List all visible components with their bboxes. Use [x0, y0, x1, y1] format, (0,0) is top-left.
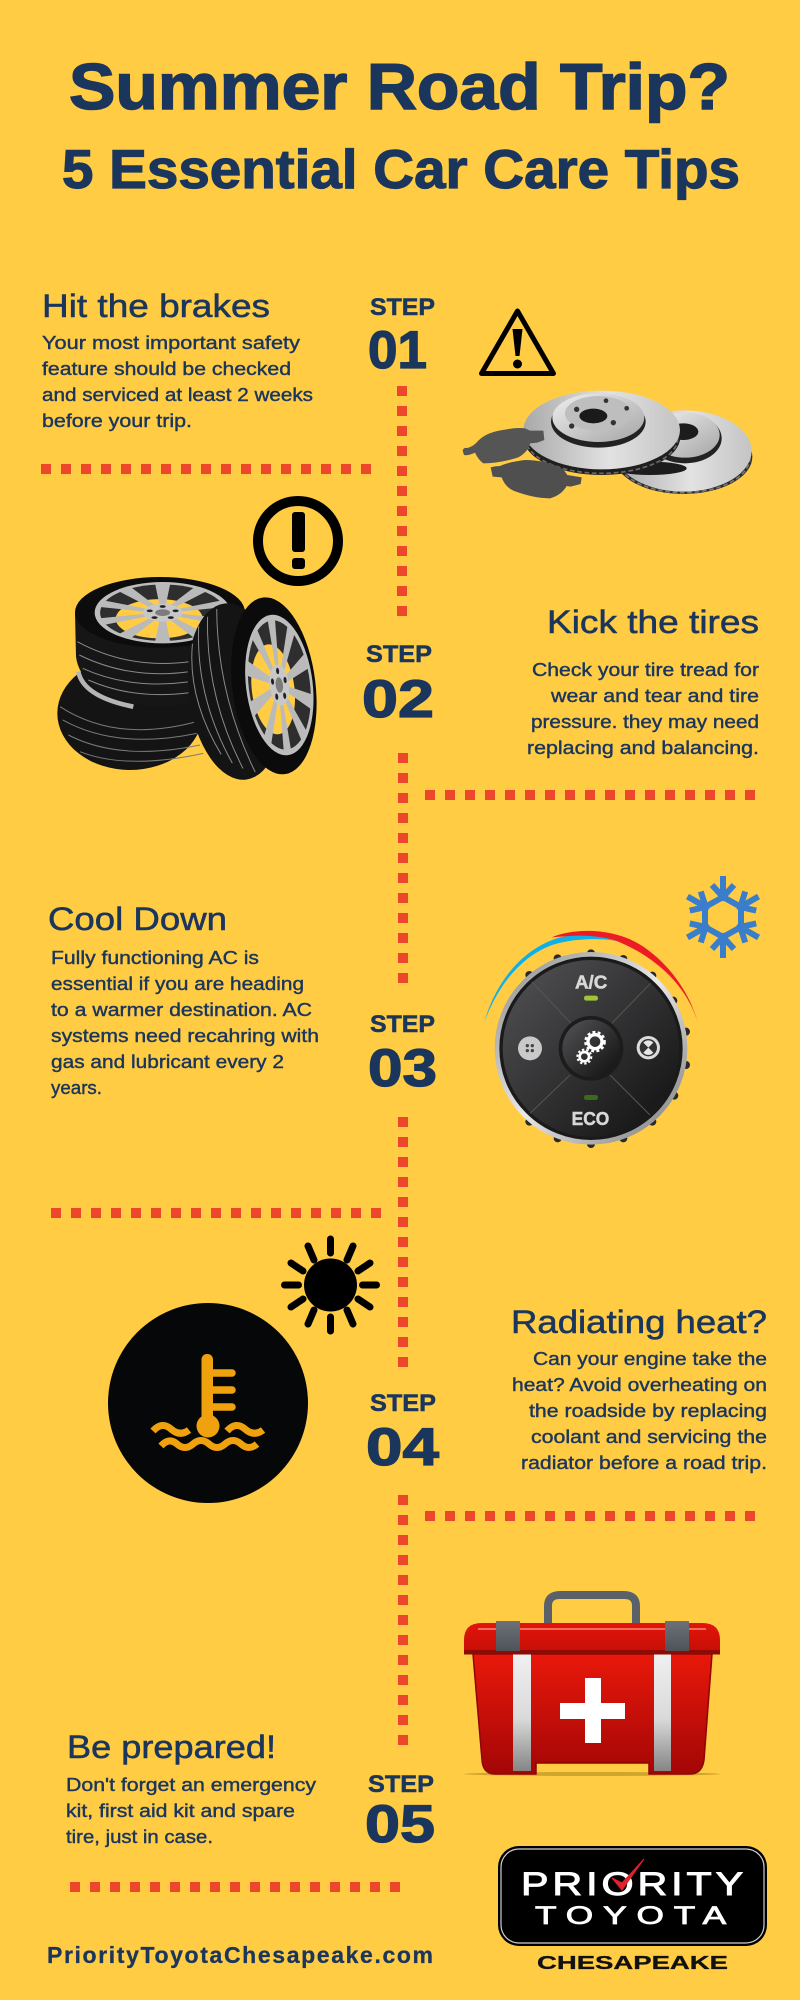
dotted timeline: vertical connectors — [402, 386, 403, 1745]
heading: Hit the brakes — [42, 288, 270, 324]
title: Summer Road Trip? — [69, 50, 730, 123]
image: stack of tires — [57, 577, 326, 785]
body text: pressure. they may need — [531, 711, 759, 732]
panel: step 4 radiating heat — [108, 1239, 767, 1516]
body text: Can your engine take the — [533, 1348, 767, 1369]
step label 05: STEP — [368, 1771, 434, 1798]
dotted divider — [70, 1882, 400, 1892]
dotted divider — [425, 790, 755, 800]
title — [62, 50, 740, 200]
body text — [527, 659, 759, 758]
body text — [512, 1348, 767, 1473]
logo: Priority Toyota Chesapeake: PRIORITY — [521, 1866, 747, 1902]
website url: PriorityToyotaChesapeake.com — [47, 1942, 433, 1968]
icon: coolant temperature warning light — [108, 1303, 308, 1503]
body text — [66, 1774, 317, 1847]
heading: Be prepared! — [67, 1729, 276, 1765]
step label 03: STEP — [370, 1011, 435, 1038]
panel: step 5 be prepared — [66, 1595, 720, 1887]
icon: snowflake — [682, 876, 764, 958]
icon: sun — [284, 1239, 376, 1331]
body text: replacing and balancing. — [527, 737, 759, 758]
step label 05: 05 — [365, 1795, 435, 1854]
step label 03: 03 — [368, 1039, 437, 1098]
body text: Fully functioning AC is — [51, 947, 259, 968]
image: AC control dial — [484, 931, 698, 1148]
step label 04 — [366, 1390, 440, 1477]
image: AC control dial: ECO — [572, 1108, 609, 1129]
step label 02 — [362, 641, 434, 729]
body text — [42, 332, 313, 431]
body text: the roadside by replacing — [529, 1400, 767, 1421]
image: AC control dial: A/C — [575, 971, 607, 992]
logo: Priority Toyota Chesapeake — [498, 1846, 767, 1973]
body text: systems need recahring with — [51, 1025, 319, 1046]
dotted divider — [51, 1208, 381, 1218]
body text: Your most important safety — [42, 332, 301, 353]
panel: step 3 cool down — [48, 876, 764, 1213]
body text: Don't forget an emergency — [66, 1774, 317, 1795]
logo: Priority Toyota Chesapeake: TOYOTA — [535, 1902, 736, 1930]
heading: Radiating heat? — [511, 1304, 767, 1340]
icon: exclamation circle — [258, 501, 338, 581]
body text: essential if you are heading — [51, 973, 304, 994]
title: 5 Essential Car Care Tips — [62, 138, 740, 200]
body text: heat? Avoid overheating on — [512, 1374, 767, 1395]
logo: Priority Toyota Chesapeake: CHESAPEAKE — [537, 1953, 728, 1973]
step label 04: 04 — [366, 1418, 440, 1477]
step label 03 — [368, 1011, 437, 1098]
icon: warning triangle — [482, 311, 554, 374]
panel: step 2 kick the tires — [57, 501, 759, 795]
heading: Cool Down — [48, 901, 227, 937]
body text — [51, 947, 319, 1098]
dotted divider — [41, 464, 371, 474]
body text: tire, just in case. — [66, 1826, 213, 1847]
dotted divider — [425, 1511, 755, 1521]
body text: gas and lubricant every 2 — [51, 1051, 284, 1072]
body text: radiator before a road trip. — [521, 1452, 767, 1473]
step label 02: 02 — [362, 670, 434, 729]
body text: years. — [51, 1077, 102, 1098]
step label 01: STEP — [370, 294, 435, 321]
step label 05 — [365, 1771, 435, 1854]
body text: and serviced at least 2 weeks — [42, 384, 313, 405]
step label 02: STEP — [366, 641, 432, 668]
body text: Check your tire tread for — [532, 659, 759, 680]
body text: wear and tear and tire — [550, 685, 759, 706]
body text: feature should be checked — [42, 358, 291, 379]
panel: step 1 hit the brakes — [41, 288, 752, 498]
image: first aid kit — [464, 1595, 720, 1776]
heading: Kick the tires — [547, 604, 759, 640]
body text: coolant and servicing the — [531, 1426, 767, 1447]
body text: before your trip. — [42, 410, 192, 431]
step label 01 — [368, 294, 435, 380]
body text: kit, first aid kit and spare — [66, 1800, 295, 1821]
step label 01: 01 — [368, 321, 427, 380]
body text: to a warmer destination. AC — [51, 999, 312, 1020]
image: brake discs and pads — [463, 391, 752, 498]
step label 04: STEP — [370, 1390, 436, 1417]
